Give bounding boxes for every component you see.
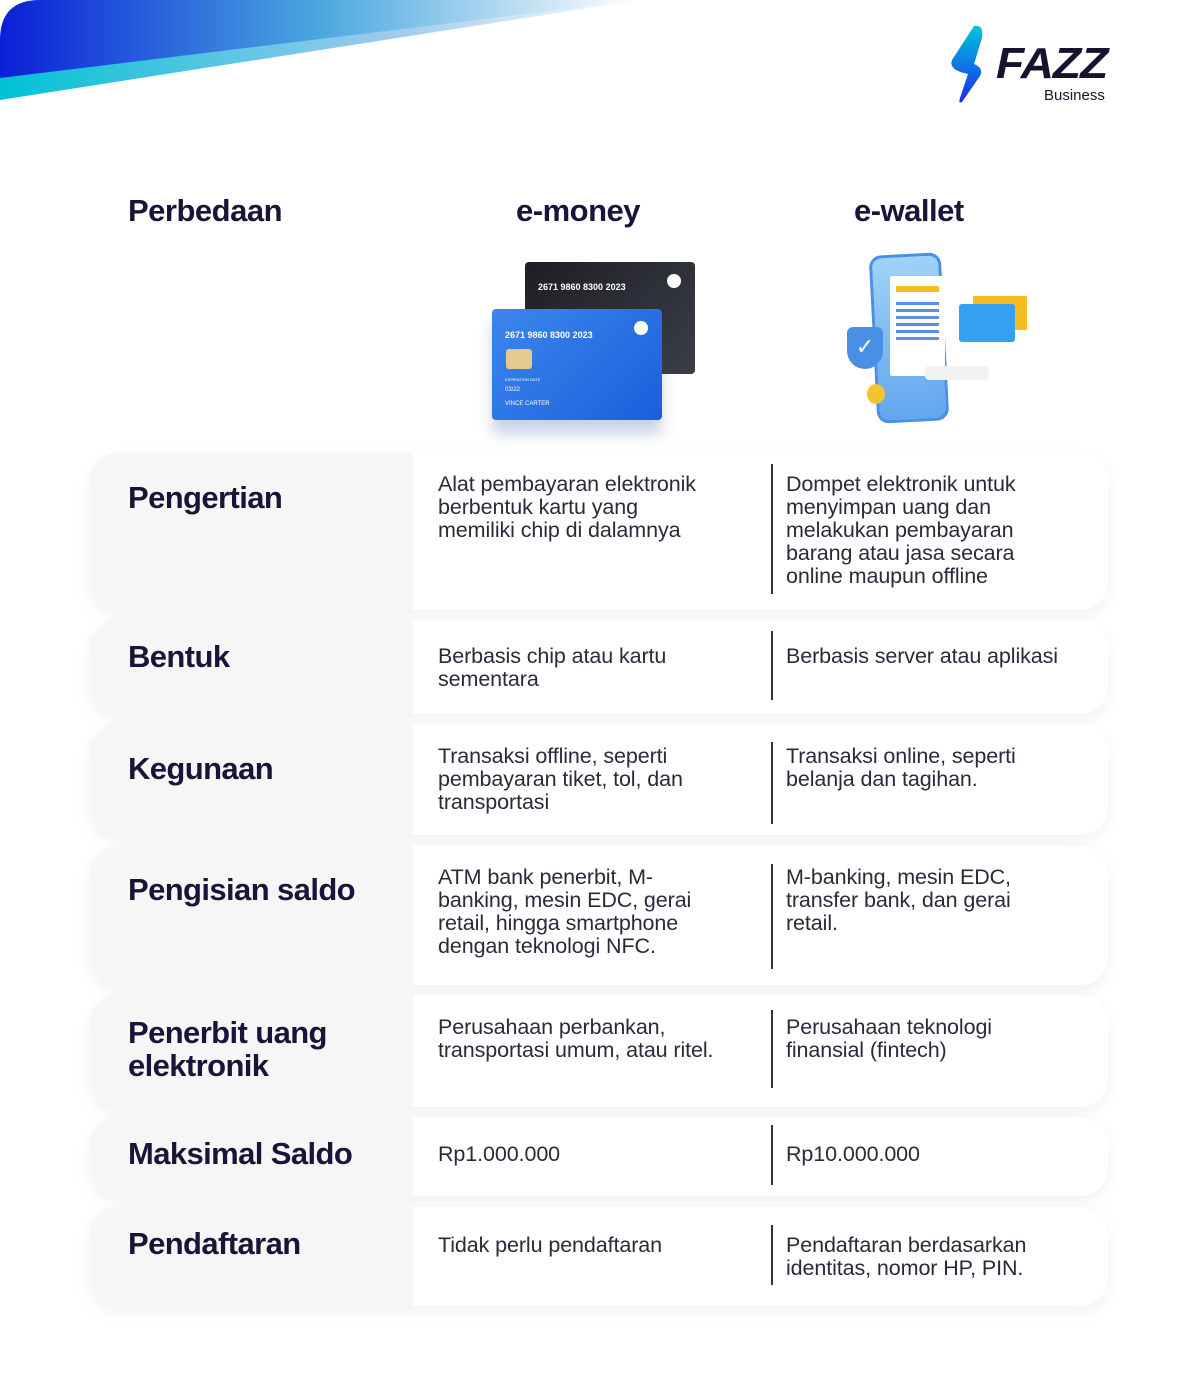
- row: Bentuk: Bentuk: [128, 639, 229, 674]
- illustration: cards: [485, 262, 695, 441]
- row: Pengertian: barang atau jasa secara: [786, 541, 1014, 565]
- row: Kegunaan: belanja dan tagihan.: [786, 767, 978, 791]
- row: Pendaftaran: [90, 1207, 1108, 1306]
- illustration: cards: VINCE CARTER: [505, 401, 550, 407]
- row: Pendaftaran: identitas, nomor HP, PIN.: [786, 1256, 1023, 1280]
- illustration: phone wallet: ✓: [856, 334, 874, 359]
- header gradient banner: [0, 0, 626, 100]
- illustration: cards: 2671 9860 8300 2023: [538, 282, 626, 292]
- row: Maksimal Saldo: [90, 1117, 1108, 1196]
- illustration: cards: 03/22: [505, 387, 520, 393]
- row: Bentuk: Berbasis server atau aplikasi: [786, 644, 1058, 668]
- illustration: phone wallet: [847, 252, 1027, 424]
- row: Penerbit uang elektronik: Perusahaan teknologi: [786, 1015, 992, 1039]
- row: Pengisian saldo: banking, mesin EDC, gerai: [438, 888, 691, 912]
- row: Kegunaan: Transaksi online, seperti: [786, 744, 1016, 768]
- logo: FAZZ Business: FAZZ: [996, 39, 1107, 88]
- row: Pengertian: Pengertian: [128, 480, 282, 515]
- row: Penerbit uang elektronik: transportasi umum, atau ritel.: [438, 1038, 713, 1062]
- row: Pengisian saldo: Pengisian saldo: [128, 872, 355, 907]
- row: Pengertian: berbentuk kartu yang: [438, 495, 638, 519]
- row: Kegunaan: [90, 724, 1108, 835]
- row: Maksimal Saldo: Maksimal Saldo: [128, 1136, 352, 1171]
- row: Pengisian saldo: ATM bank penerbit, M-: [438, 865, 653, 889]
- illustration: cards: 2671 9860 8300 2023: [505, 330, 593, 340]
- row: Penerbit uang elektronik: elektronik: [128, 1048, 268, 1083]
- row: Kegunaan: transportasi: [438, 790, 549, 814]
- row: Pengisian saldo: retail, hingga smartphone: [438, 911, 678, 935]
- heading: Perbedaan: Perbedaan: [128, 193, 282, 228]
- row: Kegunaan: pembayaran tiket, tol, dan: [438, 767, 683, 791]
- row: Bentuk: Berbasis chip atau kartu: [438, 644, 666, 668]
- row: Kegunaan: Transaksi offline, seperti: [438, 744, 667, 768]
- row: Pengisian saldo: transfer bank, dan gerai: [786, 888, 1011, 912]
- row: Pengertian: menyimpan uang dan: [786, 495, 991, 519]
- row: Pendaftaran: Tidak perlu pendaftaran: [438, 1233, 662, 1257]
- row: Pengertian: Alat pembayaran elektronik: [438, 472, 696, 496]
- row: Bentuk: sementara: [438, 667, 539, 691]
- logo: FAZZ Business: [951, 26, 1110, 104]
- row: Penerbit uang elektronik: [90, 995, 1108, 1107]
- row: Pengisian saldo: dengan teknologi NFC.: [438, 934, 656, 958]
- logo: FAZZ Business: Business: [1044, 87, 1105, 104]
- row: Pengisian saldo: retail.: [786, 911, 838, 935]
- row: Pengertian: Dompet elektronik untuk: [786, 472, 1016, 496]
- row: Pengertian: melakukan pembayaran: [786, 518, 1013, 542]
- row: Pendaftaran: Pendaftaran: [128, 1226, 301, 1261]
- row: Kegunaan: Kegunaan: [128, 751, 273, 786]
- heading: e-wallet: e-wallet: [854, 193, 964, 228]
- row: Pengertian: online maupun offline: [786, 564, 988, 588]
- row: Maksimal Saldo: Rp1.000.000: [438, 1142, 560, 1166]
- row: Penerbit uang elektronik: finansial (fintech): [786, 1038, 947, 1062]
- illustration: cards: EXPIRATION DATE: [505, 377, 540, 382]
- row: Penerbit uang elektronik: Perusahaan perbankan,: [438, 1015, 665, 1039]
- row: Pengisian saldo: M-banking, mesin EDC,: [786, 865, 1011, 889]
- row: Pengertian: memiliki chip di dalamnya: [438, 518, 680, 542]
- row: Pengisian saldo: [90, 846, 1108, 985]
- heading: e-money: e-money: [516, 193, 640, 228]
- row: Pengertian: [90, 453, 1108, 610]
- row: Pendaftaran: Pendaftaran berdasarkan: [786, 1233, 1026, 1257]
- row: Penerbit uang elektronik: Penerbit uang: [128, 1015, 327, 1050]
- row: Maksimal Saldo: Rp10.000.000: [786, 1142, 920, 1166]
- row: Bentuk: [90, 620, 1108, 714]
